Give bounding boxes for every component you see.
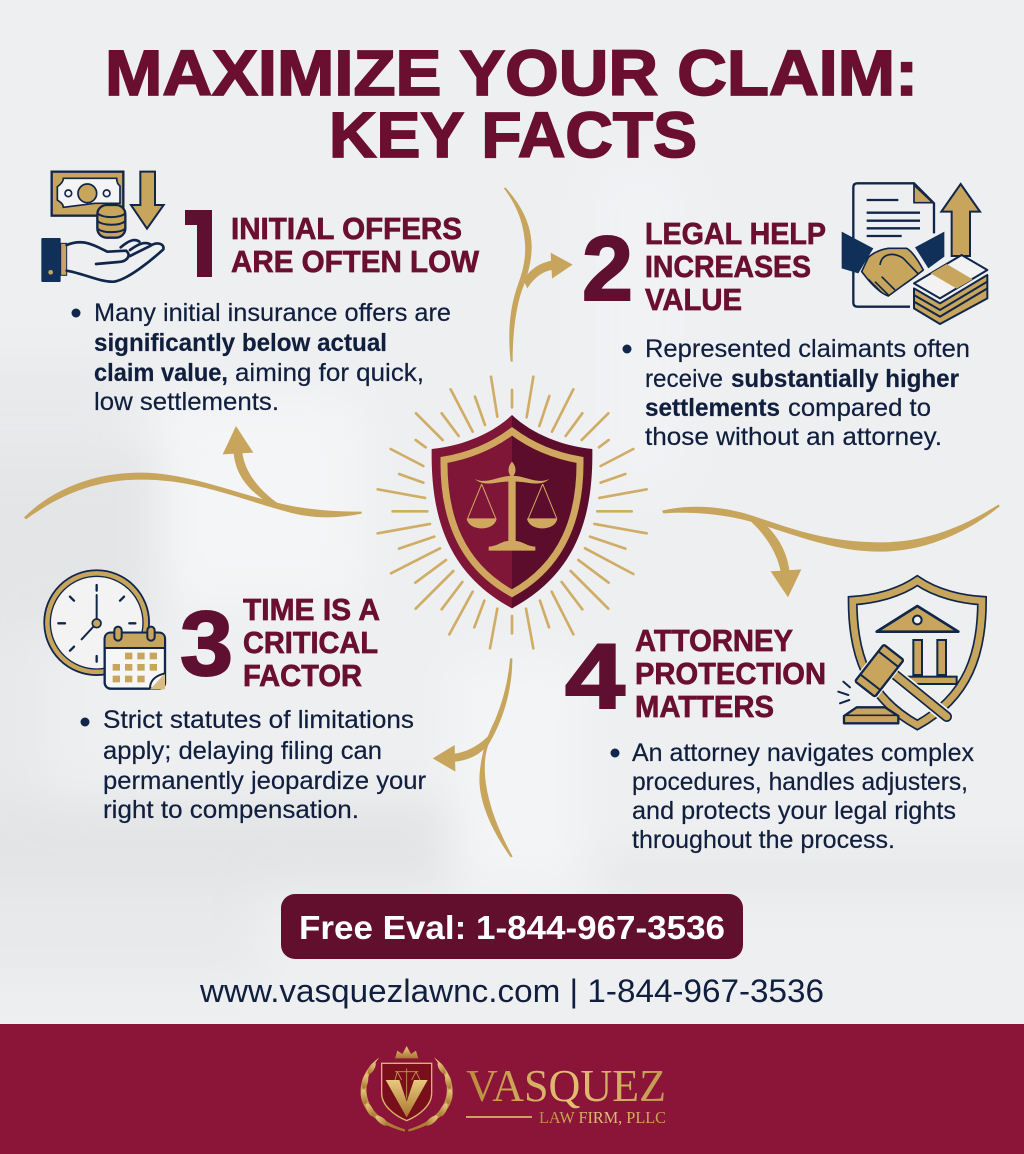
body text: Represented claimants often: [645, 335, 970, 363]
body text: [80, 706, 426, 824]
scales of justice: [467, 462, 557, 551]
body text: Many initial insurance offers are: [94, 299, 451, 327]
body text: right to compensation.: [103, 796, 359, 824]
icon: shield, courthouse and gavel: [838, 581, 982, 725]
heading: [645, 216, 826, 317]
heading: [231, 211, 480, 279]
body text: those without an attorney.: [645, 423, 942, 451]
body text: procedures, handles adjusters,: [632, 768, 968, 796]
logo wordmark: VASQUEZ: [466, 1061, 666, 1111]
body text: compared to: [788, 394, 931, 422]
fact 2: [582, 183, 987, 451]
fact 4: [565, 581, 982, 854]
arrow: right branch pointing to fact 4: [662, 504, 1000, 597]
number 3: 3: [180, 593, 233, 695]
number 1: [185, 210, 212, 277]
body text: An attorney navigates complex: [632, 739, 974, 767]
icon: money and receiving hand: [41, 172, 164, 282]
body text: aiming for quick,: [235, 359, 424, 387]
sunburst rays: [378, 377, 647, 648]
logo: Vasquez Law Firm: [360, 1046, 666, 1132]
body text: and protects your legal rights: [632, 797, 956, 825]
heading: FACTOR: [243, 658, 362, 693]
heading: LEGAL HELP: [645, 216, 826, 251]
body text: throughout the process.: [632, 826, 895, 854]
logo crest: [360, 1046, 453, 1132]
title: MAXIMIZE YOUR CLAIM:: [105, 37, 918, 109]
icon: contract, handshake, money: [842, 183, 987, 324]
fact 3: [44, 570, 426, 824]
body text: [622, 335, 970, 451]
body text: [72, 299, 451, 416]
arrow: top branch pointing to fact 2: [504, 187, 573, 362]
call-to-action button: Free Eval: 1-844-967-3536: [299, 909, 725, 946]
body text: claim value,: [94, 359, 228, 387]
heading: [635, 623, 826, 724]
heading: VALUE: [645, 282, 742, 317]
arrow: left branch pointing to fact 1: [24, 426, 362, 519]
heading: ATTORNEY: [635, 623, 793, 658]
heading: ARE OFTEN LOW: [231, 244, 480, 279]
fact 1: [41, 172, 480, 416]
title: [105, 37, 918, 171]
body text: settlements: [645, 394, 780, 422]
logo: Vasquez Law Firm: LAW FIRM, PLLC: [539, 1108, 666, 1127]
heading: CRITICAL: [243, 625, 378, 660]
title: KEY FACTS: [329, 99, 697, 171]
body text: apply; delaying filing can: [103, 737, 382, 765]
website and phone line: www.vasquezlawnc.com | 1-844-967-3536: [199, 973, 824, 1009]
footer band: [0, 1024, 1024, 1154]
central shield emblem with rays: [378, 377, 647, 648]
body text: significantly below actual: [94, 329, 387, 357]
body text: receive: [645, 365, 723, 393]
heading: INCREASES: [645, 249, 811, 284]
number 4: 4: [565, 626, 625, 728]
heading: PROTECTION: [635, 656, 826, 691]
heading: TIME IS A: [243, 592, 380, 627]
number 1: 1: [177, 195, 219, 297]
number 2: 2: [582, 218, 633, 320]
body text: low settlements.: [94, 388, 279, 416]
body text: Strict statutes of limitations: [103, 706, 414, 734]
body text: [610, 739, 974, 854]
heading: MATTERS: [635, 689, 774, 724]
heading: INITIAL OFFERS: [231, 211, 462, 246]
heading: [243, 592, 380, 693]
body text: substantially higher: [731, 365, 959, 393]
shield: [432, 415, 592, 608]
body text: permanently jeopardize your: [103, 767, 426, 795]
icon: clock and calendar: [44, 570, 165, 689]
call-to-action button: [281, 894, 743, 959]
arrow: bottom branch pointing to fact 3: [433, 658, 513, 857]
